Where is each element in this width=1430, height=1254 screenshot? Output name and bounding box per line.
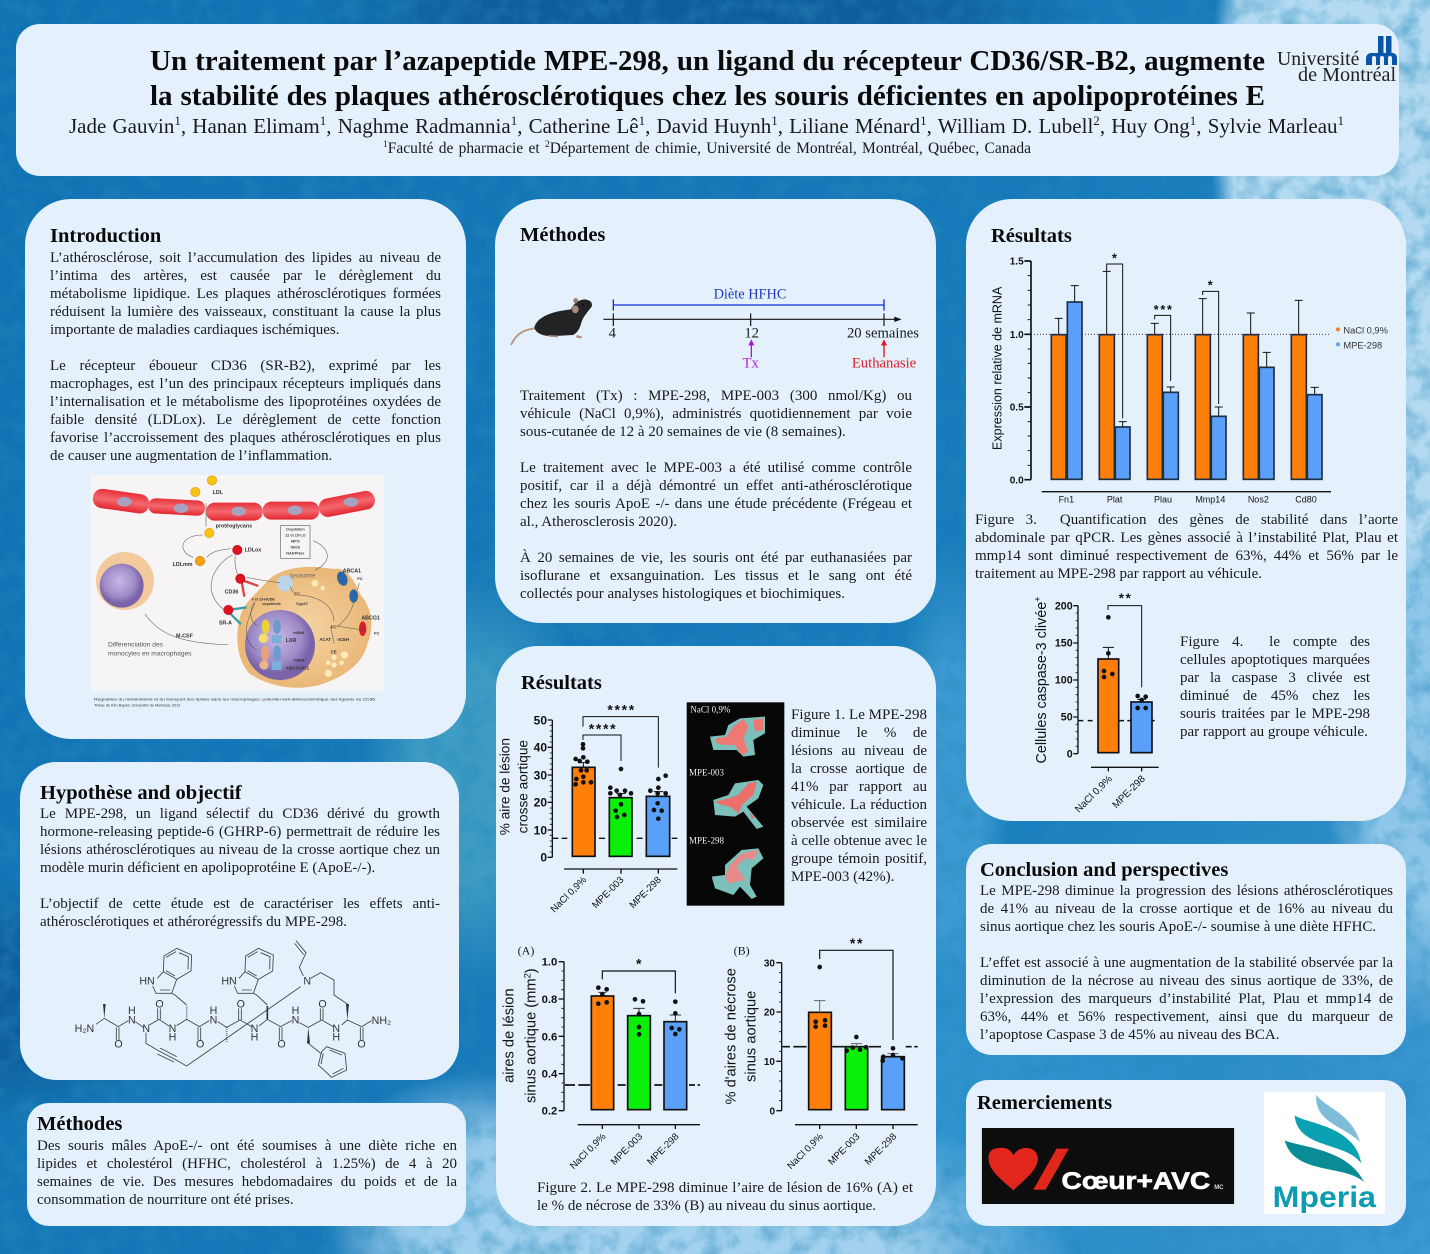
logo: Mperia	[1264, 1092, 1385, 1214]
text: figure 1 caption: MPE-003 (42%).	[791, 869, 894, 885]
panel: hypothesis and objective	[20, 762, 459, 1080]
text: hypothesis: hormone-releasing peptide-6 (GHRP-6) permettrait de réduire les	[40, 824, 440, 840]
figure 3: gene expression bar chart: 0.5	[1010, 403, 1024, 414]
text: introduction: de causer une augmentation de l’inflammation.	[50, 448, 332, 464]
heading: hypothesis: Hypothèse and objectif	[40, 782, 242, 804]
figure 3: gene expression bar chart: Mmp14	[1195, 494, 1225, 504]
text: introduction: favorise l’accroissement des plaques athérosclérotiques en plus	[50, 430, 441, 446]
text: figure 4 caption: Figure 4. le compte des	[1180, 634, 1370, 650]
diagram: lipid metabolism in macrophages: lysosome	[290, 573, 316, 579]
chemical structure: MPE-298: H₂N	[75, 1023, 94, 1035]
diagram: lipid metabolism in macrophages: Régulation du métabolisme et du transport des lipides dans les macrophages: potentiel anti-athérosclérotique des ligands du CD36	[94, 698, 375, 702]
text: figure 1 caption: diminue le % de	[791, 725, 927, 741]
chart: crosse aortique: MPE-298	[628, 875, 664, 911]
figure 3: gene expression bar chart: Fn1	[1059, 494, 1074, 504]
text: methods detail: sous-cutanée de 12 à 20 semaines de vie (8 semaines).	[520, 424, 846, 440]
text: methods detail: chez les souris ApoE -/- dans une étude précédente (Frégeau et	[520, 496, 912, 512]
arrow: Tx	[743, 339, 759, 371]
chart B: necrosis area	[724, 935, 918, 1172]
arrow: Euthanasie: Euthanasie	[852, 355, 916, 371]
figure 3: gene expression bar chart: *	[1112, 251, 1119, 265]
chart: crosse aortique	[498, 702, 677, 915]
diagram: lipid metabolism in macrophages: FC	[357, 576, 363, 581]
text: figure 3 caption: mmp14 sont diminué respectivement de 63%, 44% et 56% par le	[975, 548, 1398, 564]
heading: introduction: Introduction	[50, 225, 161, 247]
heading: results: Résultats	[991, 225, 1072, 247]
chart: crosse aortique: ****	[607, 702, 636, 718]
figure 3: gene expression bar chart: Expression relative de mRNA	[990, 286, 1004, 450]
chart A: lesion area	[502, 943, 700, 1172]
text: figure 4 caption: souris traitées par le MPE-298	[1180, 706, 1370, 722]
diagram: lipid metabolism in macrophages: ABCG1	[361, 616, 380, 622]
chemical structure: MPE-298	[75, 940, 391, 1078]
chemical structure: MPE-298: O	[318, 998, 327, 1010]
text: hypothesis	[40, 806, 440, 930]
title: Un traitement par l’azapeptide MPE-298, un ligand du récepteur CD36/SR-B2, augmente	[150, 45, 1265, 77]
chart B: necrosis area: % d'aires de nécrose	[724, 968, 740, 1105]
diagram: lipid metabolism in macrophages: nCEH	[337, 637, 349, 642]
text: methods: semaines de vie. Des mesures hebdomadaires du poids et de la	[37, 1174, 457, 1190]
image: histology: MPE-003	[689, 768, 725, 778]
text: introduction: réduisent la lumière des vaisseaux, constituant la cause la plus	[50, 304, 441, 320]
text: hypothesis: L’objectif de cette étude est de caractériser les effets anti-	[40, 896, 440, 912]
figure 3: gene expression bar chart: Plau	[1154, 494, 1172, 504]
endothelial cells	[92, 488, 376, 521]
figure 3: gene expression bar chart: 1.0	[1010, 330, 1024, 341]
diagram: lipid metabolism in macrophages: ACAT	[319, 637, 331, 642]
chart B: necrosis area: 10	[764, 1057, 775, 1068]
figure 4: caspase-3 bar chart: NaCl 0,9%	[1073, 774, 1115, 815]
chart A: lesion area: 1.0	[542, 957, 557, 969]
text: methods detail: al., Atherosclerosis 2020).	[520, 514, 677, 530]
authors: Jade Gauvin1, Hanan Elimam1, Naghme Radmannia1, Catherine Lê1, David Huynh1, Liliane Ménard1, William D. Lubell2, Huy Ong1, Sylvie Marleau1	[69, 113, 1344, 138]
text: methods detail: À 20 semaines de vie, les souris ont été par euthanasiées par	[520, 550, 912, 566]
diagram: lipid metabolism in macrophages: CD36	[225, 589, 238, 595]
chart: crosse aortique: MPE-003	[590, 875, 626, 911]
text: methods detail: collectés pour analyses histologiques et biochimiques.	[520, 586, 845, 602]
text: figure 4 caption: diminué de 45% chez les	[1180, 688, 1370, 704]
chart B: necrosis area: sinus aortique	[744, 991, 760, 1082]
text: figure 4 caption: par rapport au groupe véhicule.	[1180, 724, 1368, 740]
heading: methods: Méthodes	[37, 1113, 122, 1135]
panel: methods left	[27, 1103, 466, 1226]
text: methods detail	[520, 388, 912, 602]
chart A: lesion area: MPE-003	[609, 1131, 645, 1168]
text: figure 3 caption: Figure 3. Quantification des gènes de stabilité dans l’aorte	[975, 512, 1398, 528]
image: histology	[687, 702, 784, 906]
diagram: lipid metabolism in macrophages: iNOS	[291, 546, 300, 550]
title	[150, 45, 1265, 112]
figure 4: caspase-3 bar chart: 150	[1055, 638, 1073, 650]
chart A: lesion area: )	[524, 968, 540, 973]
text: introduction: Le récepteur éboueur CD36 (SR-B2), exprimé par les	[50, 358, 441, 374]
figure 4: caspase-3 bar chart	[1033, 591, 1159, 815]
chemical structure: MPE-298: H	[251, 1032, 258, 1044]
text: figure 1 caption: 41% par rapport au	[791, 779, 927, 795]
text: figure 1 caption: la crosse aortique de	[791, 761, 927, 777]
text: figure 1 caption: véhicule. La réduction	[791, 797, 927, 813]
diagram: lipid metabolism in macrophages: FC	[374, 631, 379, 636]
logo: Mperia: Mperia	[1273, 1181, 1377, 1214]
text: figure 1 caption: Figure 1. Le MPE-298	[791, 707, 927, 723]
text: figure 1 caption: lésions au niveau de	[791, 743, 927, 759]
text: introduction: métabolisme lipidique. Les plaques athérosclérotiques formées	[50, 286, 441, 302]
chemical structure: MPE-298: N	[303, 976, 311, 988]
panel: introduction	[25, 199, 466, 739]
nuclear receptor shapes	[259, 619, 282, 670]
text: methods detail: Le traitement avec le MPE-003 a été utilisé comme contrôle	[520, 460, 912, 476]
chemical structure: MPE-298: O	[114, 1038, 123, 1050]
text: methods: lipides et cholestérol (HFHC, cholestérol à 1.25%) de 4 à 20	[37, 1156, 457, 1172]
chemical structure: MPE-298: O	[357, 1038, 366, 1050]
text: conclusion: 63%, 44% et 56% respectivement, ainsi que du marqueur de	[980, 1009, 1393, 1025]
text: methods detail: positif, car il a déjà démontré un effet anti-athérosclérotique	[520, 478, 912, 494]
logo: Université de Montréal: Université	[1277, 48, 1360, 70]
chemical structure: MPE-298: N	[251, 1023, 258, 1035]
diagram: lipid metabolism in macrophages: mRNA	[293, 631, 305, 635]
figure 3: gene expression bar chart: Cd80	[1295, 494, 1317, 504]
text: methods: consommation de nourriture ont été prises.	[37, 1192, 294, 1208]
arrow: Tx: Tx	[743, 355, 759, 371]
figure 2: sinus aortique charts	[502, 935, 918, 1172]
chemical structure: MPE-298: H	[210, 1005, 217, 1017]
chemical structure: MPE-298: O	[196, 1038, 204, 1050]
text: figure 3 caption: traitement au MPE-298 par rapport au véhicule.	[975, 566, 1262, 582]
timeline	[510, 287, 919, 371]
figure 3: gene expression bar chart: 1.5	[1010, 257, 1024, 268]
chart: crosse aortique: crosse aortique	[516, 740, 531, 833]
timeline: 12	[744, 326, 759, 342]
diagram: lipid metabolism in macrophages: LDLmm	[173, 562, 193, 568]
text: figure 2 caption: Figure 2. Le MPE-298 diminue l’aire de lésion de 16% (A) et	[537, 1180, 913, 1196]
figure 4: caspase-3 bar chart: +	[1033, 597, 1043, 602]
text: hypothesis: athérosclérotiques et athérorégressifs du MPE-298.	[40, 914, 347, 930]
text: figure 3 caption	[975, 512, 1398, 582]
chart B: necrosis area: MPE-298	[863, 1131, 899, 1168]
figure 4: caspase-3 bar chart: 0	[1067, 748, 1073, 760]
chart A: lesion area: sinus aortique (mm	[524, 978, 540, 1103]
text: introduction: macrophages, est l’un des principaux récepteurs impliqués dans	[50, 376, 441, 392]
text: hypothesis: modèle murin déficient en apolipoprotéine E (ApoE-/-).	[40, 860, 375, 876]
legend: NaCl 0,9%	[1343, 325, 1388, 335]
text: methods detail: isoflurane et exsanguination. Les tissus et le sang ont été	[520, 568, 912, 584]
text: conclusion: l’apoptose Caspase 3 de 45% au niveau des BCA.	[980, 1027, 1280, 1043]
text: conclusion: Le MPE-298 diminue la progression des lésions athérosclérotiques	[980, 883, 1393, 899]
text: hypothesis: lésions athérosclérotiques au niveau de la crosse aortique chez un	[40, 842, 440, 858]
arrow: Euthanasie	[852, 339, 916, 371]
diagram: lipid metabolism in macrophages: protéoglycans	[216, 524, 252, 530]
text: methods: Des souris mâles ApoE-/- ont été soumises à une diète riche en	[37, 1138, 457, 1154]
figure 4: caspase-3 bar chart: 200	[1055, 600, 1073, 612]
text: introduction: l’intima des artères, est causée par le dérèglement du	[50, 268, 441, 284]
panel: acknowledgements	[966, 1080, 1406, 1226]
text: introduction: L’athérosclérose, soit l’accumulation des lipides au niveau de	[50, 250, 441, 266]
affiliations: 1Faculté de pharmacie et 2Département de chimie, Université de Montréal, Montréal, Québec, Canada	[383, 139, 1031, 157]
diagram: lipid metabolism in macrophages: oxystérols	[262, 602, 281, 606]
text: methods detail: véhicule (NaCl 0,9%), administrés quotidiennement par voie	[520, 406, 912, 422]
legend	[1336, 325, 1388, 350]
text: introduction: importante de maladies cardiaques ischémiques.	[50, 322, 339, 338]
chemical structure: MPE-298: O	[155, 998, 164, 1010]
diagram: lipid metabolism in macrophages: MPO	[291, 540, 300, 544]
text: methods	[37, 1138, 457, 1208]
chemical structure: MPE-298: N	[169, 1023, 176, 1035]
chart A: lesion area: NaCl 0,9%	[568, 1131, 609, 1172]
chemical structure: MPE-298: N	[128, 1014, 136, 1026]
diagram: lipid metabolism in macrophages: 12 et 15-LO	[285, 534, 306, 538]
logo: Université de Montréal	[1277, 36, 1397, 86]
chart A: lesion area: 0.8	[542, 994, 557, 1006]
figure 3: gene expression bar chart: *	[1208, 279, 1214, 293]
text: conclusion: de 41% au niveau de la crosse aortique et de 16% au niveau du	[980, 901, 1393, 917]
diagram: lipid metabolism in macrophages: FC	[294, 591, 300, 596]
panel: results right	[966, 199, 1406, 821]
text: methods detail: Traitement (Tx) : MPE-298, MPE-003 (300 nmol/Kg) ou	[520, 388, 912, 404]
chart A: lesion area: 0.6	[542, 1031, 557, 1043]
panel: methods centre	[495, 199, 936, 623]
diagram: lipid metabolism in macrophages: LDLox	[245, 548, 261, 554]
diagram: lipid metabolism in macrophages: LXR	[286, 638, 296, 644]
diagram: lipid metabolism in macrophages: ABCA1/G1	[286, 665, 310, 670]
text: figure 1 caption: groupe témoin positif,	[791, 851, 927, 867]
chemical structure: MPE-298: H	[332, 1032, 340, 1044]
text: conclusion: sinus aortique chez les souris ApoE-/- soumise à une diète HFHC.	[980, 919, 1376, 935]
legend: MPE-298	[1343, 340, 1382, 350]
figure 3: gene expression bar chart: 0.0	[1010, 475, 1024, 486]
macrophage	[237, 567, 371, 688]
image: histology: NaCl 0,9%	[690, 705, 731, 715]
chart: crosse aortique: % aire de lésion	[498, 738, 513, 835]
text: conclusion: L’effet est associé à une augmentation de la stabilité observée par la	[980, 955, 1393, 971]
diagram: lipid metabolism in macrophages: mRNA	[293, 658, 305, 662]
heading: acknowledgements: Remerciements	[977, 1092, 1112, 1114]
chart A: lesion area: (A)	[518, 943, 534, 957]
text: hypothesis: Le MPE-298, un ligand sélectif du CD36 dérivé du growth	[40, 806, 440, 822]
figure 1: bar chart and histology	[498, 702, 784, 915]
panel: conclusion	[966, 844, 1406, 1055]
lipoprotein particles	[191, 476, 217, 538]
logo: Coeur + AVC	[982, 1128, 1234, 1204]
heading: methods: Méthodes	[520, 224, 605, 246]
chart: crosse aortique: 10	[534, 823, 547, 837]
chemical structure: MPE-298: H	[169, 1032, 176, 1044]
logo: Coeur + AVC: MC	[1214, 1185, 1224, 1191]
diagram: lipid metabolism in macrophages: LDL	[213, 490, 224, 496]
text: conclusion: diminution de la nécrose au niveau des sinus aortique de 33%, de	[980, 973, 1393, 989]
text: introduction: faible densité (LDLox). Le dérèglement de cette fonction	[50, 412, 441, 428]
text: figure 1 caption: observée est similaire	[791, 815, 927, 831]
logo: Coeur + AVC: Cœur+AVC	[1062, 1168, 1210, 1195]
chart A: lesion area: 0.2	[542, 1106, 557, 1118]
figure 4: caspase-3 bar chart: MPE-298	[1111, 773, 1148, 811]
image: histology: MPE-298	[689, 836, 725, 846]
text: figure 2 caption: le % de nécrose de 33% (B) au niveau du sinus aortique.	[537, 1198, 876, 1214]
chemical structure: MPE-298: H	[128, 1005, 136, 1017]
diagram: lipid metabolism in macrophages: 9 et 13-HODE	[252, 598, 275, 602]
figure 4: caspase-3 bar chart: 100	[1055, 675, 1073, 687]
chart A: lesion area: aires de lésion	[502, 988, 518, 1083]
diagram: lipid metabolism in macrophages: Différenciation des	[108, 641, 164, 648]
figure 4: caspase-3 bar chart: 50	[1061, 712, 1073, 724]
text: conclusion	[980, 883, 1393, 1043]
text: figure 1 caption: à celle obtenue avec le	[791, 833, 927, 849]
text: conclusion: l’expression des marqueurs d’instabilité Plat, Plau et mmp14 de	[980, 991, 1393, 1007]
diagram: lipid metabolism in macrophages: Thèse de Kim Bujold, Université de Montréal, 2012	[94, 704, 180, 708]
chart A: lesion area: *	[636, 956, 642, 972]
chemical structure: MPE-298: NH₂	[372, 1015, 391, 1027]
chart: crosse aortique: 20	[534, 796, 547, 810]
receptors	[242, 580, 258, 597]
logo: Université de Montréal: de Montréal	[1298, 64, 1396, 86]
figure 4: caspase-3 bar chart: Cellules caspase-3 clivée	[1034, 602, 1050, 763]
chemical structure: MPE-298: N	[292, 1014, 299, 1026]
heading: conclusion: Conclusion and perspectives	[980, 859, 1228, 881]
diagram: lipid metabolism in macrophages: CE	[331, 649, 337, 654]
chart B: necrosis area: MPE-003	[826, 1131, 862, 1168]
chemical structure: MPE-298: N	[332, 1023, 340, 1035]
chemical structure: MPE-298: O	[237, 998, 245, 1010]
panel: results centre	[496, 646, 936, 1226]
figure 4: caspase-3 bar chart: **	[1119, 591, 1133, 606]
chart B: necrosis area: 30	[764, 958, 775, 969]
diagram: lipid metabolism in macrophages: SR-A	[219, 620, 232, 626]
text: figure 1 caption	[791, 707, 927, 885]
chemical structure: MPE-298: H	[292, 1005, 299, 1017]
heading: results: Résultats	[521, 672, 602, 694]
diagram: lipid metabolism in macrophages: monocytes en macrophages	[108, 650, 192, 657]
text: introduction	[50, 250, 441, 464]
monocyte	[96, 552, 154, 610]
text: introduction: l’internalisation et le métabolisme des lipoprotéines oxydées de	[50, 394, 441, 410]
chart A: lesion area: 2	[522, 973, 532, 978]
chemical structure: MPE-298: N	[142, 1023, 150, 1035]
timeline: 20 semaines	[847, 326, 919, 342]
text: figure 4 caption: cellules apoptotiques marquées	[1180, 652, 1370, 668]
HFHC diet bar	[613, 299, 884, 311]
chart B: necrosis area: 0	[769, 1106, 775, 1117]
chart B: necrosis area: 20	[764, 1008, 775, 1019]
icon: mouse	[511, 298, 592, 345]
diagram: lipid metabolism in macrophages: Oxydation	[286, 528, 305, 532]
timeline: 4	[609, 326, 617, 342]
pathway arrows	[145, 503, 367, 650]
diagram: lipid metabolism in macrophages	[90, 475, 384, 708]
axis	[603, 318, 897, 321]
chemical structure: MPE-298: O	[277, 1038, 286, 1050]
diagram: lipid metabolism in macrophages: FC	[331, 624, 336, 629]
diagram: lipid metabolism in macrophages: Cyp27	[296, 601, 309, 606]
chart: crosse aortique: NaCl 0,9%	[549, 874, 589, 915]
chart: crosse aortique: 50	[534, 713, 547, 727]
chart A: lesion area: MPE-298	[645, 1131, 681, 1168]
panel: title	[16, 24, 1399, 176]
diagram: lipid metabolism in macrophages: M-CSF	[176, 634, 194, 640]
title: la stabilité des plaques athérosclérotiques chez les souris déficientes en apolipoprotéines E	[150, 80, 1265, 112]
chemical structure: MPE-298: HN	[221, 976, 237, 988]
diagram: lipid metabolism in macrophages: NADPHox	[286, 552, 305, 556]
chart B: necrosis area: **	[850, 935, 864, 951]
chart: crosse aortique: 40	[534, 741, 547, 755]
figure 3: gene expression bar chart	[990, 251, 1388, 504]
chart: crosse aortique: 30	[534, 768, 547, 782]
chart: crosse aortique: 0	[540, 851, 547, 865]
text: figure 4 caption	[1180, 634, 1370, 740]
timeline: Diète HFHC	[714, 287, 786, 303]
figure 3: gene expression bar chart: Nos2	[1248, 494, 1269, 504]
chart A: lesion area: 0.4	[542, 1069, 558, 1081]
figure 3: gene expression bar chart: ***	[1154, 303, 1174, 317]
chart B: necrosis area: NaCl 0,9%	[785, 1131, 826, 1172]
chart: crosse aortique: ****	[589, 721, 617, 737]
chemical structure: MPE-298: N	[210, 1014, 217, 1026]
figure 3: gene expression bar chart: Plat	[1107, 494, 1123, 504]
chemical structure: MPE-298: HN	[139, 976, 155, 988]
text: figure 3 caption: abdominale par qPCR. Les gènes associé à l’instabilité Plat, Plau et	[975, 530, 1398, 546]
diagram: lipid metabolism in macrophages: ABCA1	[343, 568, 361, 574]
text: figure 2 caption	[537, 1180, 913, 1214]
text: figure 4 caption: par la caspase 3 clivée est	[1180, 670, 1370, 686]
chart B: necrosis area: (B)	[734, 943, 750, 957]
